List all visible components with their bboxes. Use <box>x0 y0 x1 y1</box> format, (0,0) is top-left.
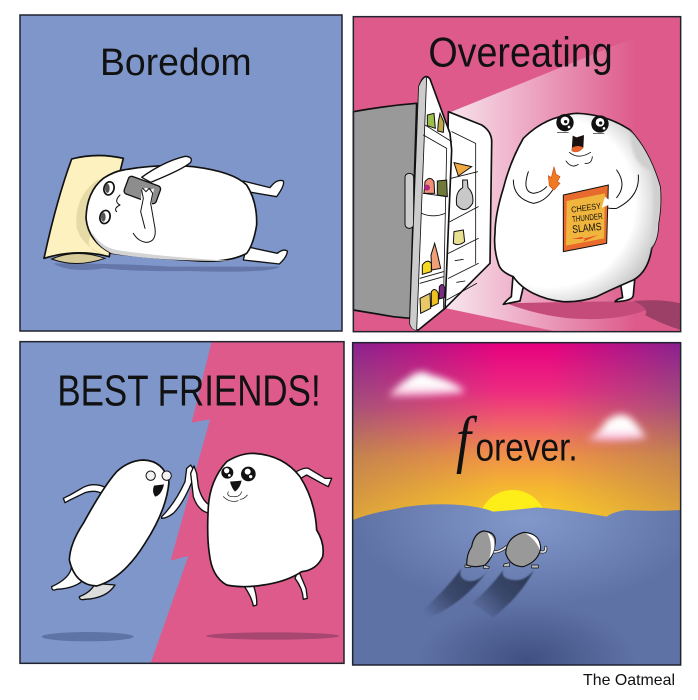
fat character <box>495 113 670 304</box>
cloud left <box>388 372 463 396</box>
right character <box>191 453 332 606</box>
chins <box>566 152 592 166</box>
left character <box>52 460 195 600</box>
cheese <box>454 163 472 176</box>
background pink lightning side <box>151 342 344 663</box>
eyes <box>102 181 116 196</box>
long shadows <box>422 568 534 617</box>
floor shadow <box>53 263 280 272</box>
frame <box>353 343 681 665</box>
two friends walking <box>465 531 546 569</box>
title: Boredom: Boredom <box>100 42 252 84</box>
jug <box>456 180 473 210</box>
panel background pink <box>353 17 681 332</box>
fridge shelves <box>447 132 478 300</box>
panel: forever sunset <box>353 343 681 665</box>
sun <box>479 490 547 558</box>
panel: best friends <box>20 342 344 663</box>
chip bag <box>563 185 608 252</box>
frame <box>20 342 344 663</box>
chip bag: SLAMS <box>572 221 602 236</box>
panel background blue <box>20 15 342 331</box>
title: BEST FRIENDS!: BEST FRIENDS! <box>57 366 321 415</box>
cloud right <box>587 415 647 441</box>
arms <box>513 170 638 208</box>
phone <box>123 175 161 205</box>
frame <box>353 17 681 332</box>
refrigerator <box>353 77 492 330</box>
frame <box>20 15 342 331</box>
hills ground <box>353 504 681 665</box>
signature: The Oatmeal: The Oatmeal <box>583 672 675 689</box>
panel: boredom <box>20 15 342 331</box>
title: forever.: forever. <box>456 405 578 475</box>
title: Overeating: Overeating <box>428 30 613 76</box>
chip bag: CHEESY <box>571 201 602 215</box>
background blue side <box>20 342 344 663</box>
mouth with food <box>572 135 584 152</box>
pillow <box>44 155 123 264</box>
sky gradient <box>353 343 681 529</box>
character lying down <box>86 156 287 264</box>
raised arm <box>142 156 191 182</box>
light beam <box>447 37 637 332</box>
chip bag: THUNDER <box>571 211 603 224</box>
door <box>410 77 452 330</box>
eyes <box>556 114 574 131</box>
ground shadow left <box>42 632 134 641</box>
floor shadow light <box>507 302 646 319</box>
flaming chip <box>548 167 560 190</box>
ground shadow right <box>206 632 339 640</box>
hand on bag <box>602 197 613 208</box>
jar <box>453 230 465 245</box>
mouth <box>116 195 120 212</box>
hand and forearm <box>133 188 155 242</box>
grey shading on right side <box>628 129 660 254</box>
panel: overeating <box>353 17 681 332</box>
floor shadow dark <box>633 300 681 330</box>
door bottles and jars <box>427 113 435 128</box>
